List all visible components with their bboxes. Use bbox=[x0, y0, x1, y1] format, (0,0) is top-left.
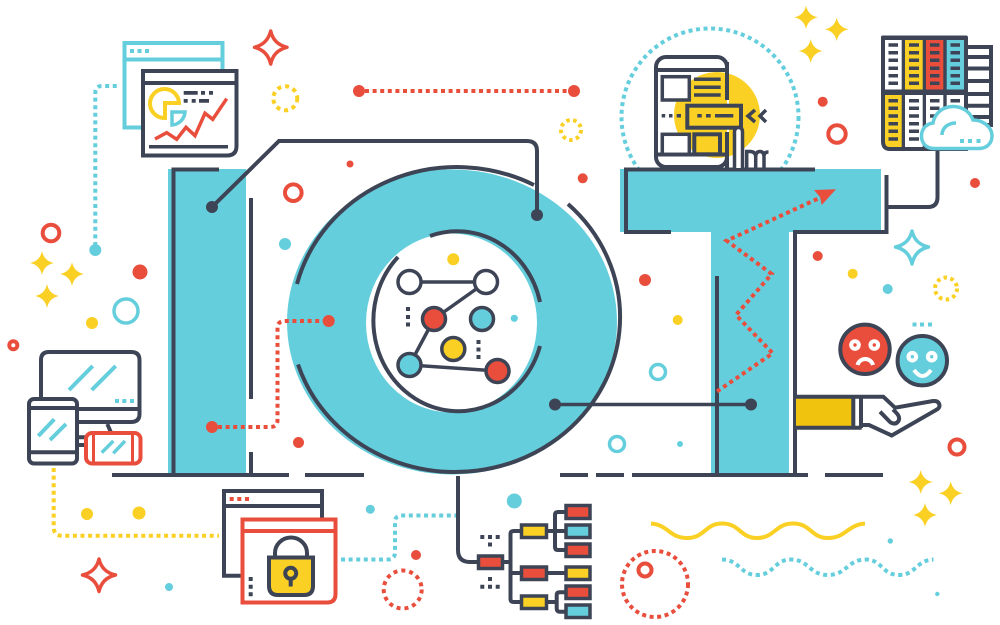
yellow sparkles top right bbox=[794, 6, 849, 63]
red dotted connector on top bbox=[353, 85, 580, 97]
red tablet bbox=[86, 433, 140, 464]
monitor bbox=[41, 352, 140, 432]
analytics windows top left bbox=[124, 43, 236, 156]
teal dotted wave bbox=[722, 560, 934, 575]
front dark window bbox=[143, 71, 236, 156]
teal dotted connector to analytics bbox=[89, 86, 119, 256]
padlock bbox=[275, 538, 307, 558]
cloud bbox=[922, 106, 992, 148]
yellow dotted connector bbox=[54, 468, 219, 536]
yellow wave bbox=[651, 524, 865, 538]
connector: cloud to T bbox=[888, 148, 938, 207]
red sparkle bottom left bbox=[82, 559, 116, 592]
connector: O to T bbox=[549, 398, 757, 410]
teal sparkle right bbox=[896, 231, 928, 264]
red dotted connector inside I-O bbox=[206, 315, 335, 433]
yellow sparkles left bbox=[30, 251, 84, 308]
back sheet bbox=[966, 47, 991, 125]
back window bbox=[224, 491, 322, 576]
tree diagram bottom bbox=[458, 476, 590, 618]
sad face bbox=[840, 325, 890, 374]
baseline bbox=[112, 473, 883, 477]
hand with sleeve bbox=[795, 397, 940, 436]
front sheet bbox=[881, 36, 968, 151]
legend marks bbox=[184, 91, 213, 103]
front red window bbox=[242, 520, 336, 602]
network inside O bbox=[398, 253, 518, 382]
teal dotted connector bottom bbox=[341, 516, 456, 560]
dotted teal halo around phone bbox=[622, 28, 798, 206]
phone with storefront bbox=[656, 57, 768, 168]
letter O bbox=[287, 167, 620, 474]
line chart bbox=[155, 99, 227, 139]
connector: I to O top bbox=[206, 141, 543, 221]
yellow sparkles bottom right bbox=[909, 470, 963, 527]
red sparkle top bbox=[254, 31, 287, 64]
red zigzag dotted arrow on T bbox=[717, 189, 836, 392]
back teal window bbox=[124, 43, 222, 128]
data tables top right bbox=[881, 36, 991, 151]
letter T bbox=[620, 169, 886, 475]
pie chart bbox=[150, 89, 179, 118]
happy face bbox=[898, 322, 947, 385]
letter I bbox=[168, 169, 251, 475]
phone bbox=[29, 399, 77, 464]
security windows bottom bbox=[224, 491, 336, 602]
red dotted target circle bbox=[622, 551, 688, 617]
pointing finger bbox=[734, 128, 742, 168]
devices left bbox=[29, 352, 140, 464]
